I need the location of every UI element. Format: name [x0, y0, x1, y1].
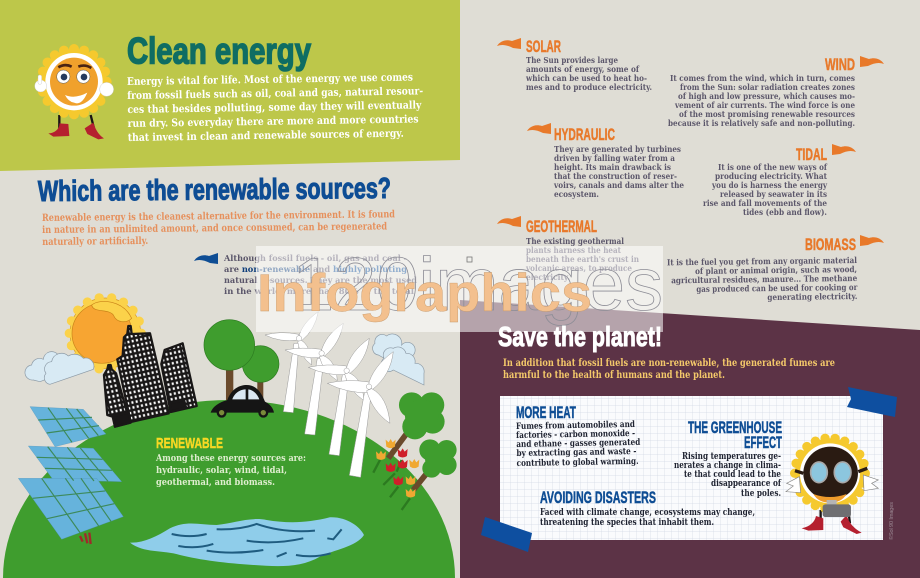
section: hydraulic: height. Its main drawback is: [554, 162, 671, 172]
section: tidal: producing electricity. What: [715, 171, 827, 181]
arrow: blue: [194, 253, 218, 264]
text: fossil fuels note: natural resources. They are the most used: [224, 275, 417, 285]
text: fumes warning: In addition that fossil fuels are non-renewable, the generated fumes are: [503, 358, 835, 369]
heading: Save the planet!: Save the planet!: [498, 321, 662, 352]
section: biomass: generating electricity.: [767, 291, 858, 302]
section: wind: of the most promising renewable resources: [679, 109, 855, 119]
illustration: green planet scene: [3, 297, 457, 578]
text: fossil fuels note: [223, 253, 417, 296]
section: greenhouse effect: the poles.: [741, 489, 781, 499]
section: wind: of high and low pressure, which causes mo-: [678, 91, 855, 101]
section: avoiding disasters: AVOIDING DISASTERS: [540, 488, 656, 507]
trees and car: [204, 320, 279, 418]
section: hydraulic: HYDRAULIC: [554, 125, 615, 144]
panel: save the planet background: [460, 300, 920, 578]
text: fossil fuels note: in the world, more than 80% of the total: [224, 286, 414, 296]
intro text: Energy is vital for life. Most of the energy we use comes: [127, 72, 413, 88]
text: renewable label: Among these energy sources are:: [155, 453, 306, 464]
section: more heat: [516, 403, 641, 469]
watermark: Infographics: [257, 264, 592, 323]
section: solar: SOLAR: [526, 37, 561, 56]
section: solar: The Sun provides large: [526, 55, 618, 65]
section: wind: from the Sun: solar radiation creates zones: [680, 82, 855, 92]
section: tidal: rise and fall movements of the: [703, 198, 827, 208]
section: more heat: Fumes from automobiles and: [516, 420, 635, 432]
section: tidal: [703, 144, 856, 217]
intro text: from fossil fuels such as oil, coal and gas, natural resour-: [127, 85, 423, 102]
section: biomass: agricultural residues, manure... The methane: [671, 273, 857, 285]
section: biomass: It is the fuel you get from any organic material: [667, 255, 857, 267]
section: solar: [497, 37, 652, 92]
section: wind: because it is relatively safe and non-polluting.: [668, 118, 855, 128]
section: wind: It comes from the wind, which in turn, comes: [670, 73, 855, 83]
clouds: [25, 334, 424, 385]
section: geothermal: plants harness the heat: [526, 245, 621, 255]
section: biomass: gas produced can be used for cooking or: [696, 282, 858, 294]
text: renewable label: RENEWABLE: [156, 435, 223, 452]
lake: [130, 517, 364, 566]
renewable intro text: naturally or artificially.: [42, 236, 148, 248]
title: Clean energy: Clean energy: [127, 30, 311, 72]
renewable intro text: Renewable energy is the cleanest alternative for the environment. It is found: [42, 209, 395, 224]
section: greenhouse effect: EFFECT: [744, 433, 782, 452]
section: more heat: factories - carbon monoxide -: [516, 429, 635, 441]
section: avoiding disasters: [540, 488, 755, 528]
text: renewable label: hydraulic, solar, wind, tidal,: [156, 465, 287, 476]
section: hydraulic: driven by falling water from a: [554, 153, 675, 163]
section: tidal: TIDAL: [796, 145, 827, 164]
section: greenhouse effect: THE GREENHOUSE: [688, 418, 782, 437]
mascot: smiling sun: [35, 49, 114, 139]
section: tidal: tides (ebb and flow).: [743, 207, 827, 217]
tape: bottom left: [481, 517, 532, 552]
section: greenhouse effect: te that could lead to the: [684, 470, 781, 480]
text: renewable label: [155, 435, 306, 488]
big sun: [69, 297, 141, 369]
section: wind: WIND: [825, 55, 855, 74]
section: geothermal: electricity.: [526, 272, 570, 282]
watermark: 120images: [292, 242, 663, 326]
text: fumes warning: [503, 358, 835, 381]
right trees and flowers: [373, 392, 457, 510]
section: greenhouse effect: disappearance of: [711, 479, 782, 489]
section: greenhouse effect: Rising temperatures ge-: [682, 452, 781, 462]
renewable intro text: in nature in an unlimited amount, and once consumed, can be regenerated: [42, 221, 387, 236]
section: more heat: and ethane - gasses generated: [516, 438, 640, 450]
section: more heat: contribute to global warming.: [517, 457, 639, 469]
section: geothermal: [497, 216, 639, 282]
text: renewable label: geothermal, and biomass.: [156, 477, 275, 488]
section: geothermal: beneath the earth's crust in: [526, 254, 639, 264]
photo credit: ©Sol 90 Images: [888, 502, 895, 540]
panel: grid paper note: [500, 396, 883, 540]
section: biomass: of plant or animal origin, such as wood,: [695, 264, 857, 276]
solar panels: [18, 407, 123, 544]
section: geothermal: volcanic areas, to produce: [525, 263, 632, 273]
section: greenhouse effect: nerates a change in clima-: [674, 461, 781, 471]
section: hydraulic: voirs, canals and dams alter the: [553, 180, 684, 190]
section: solar: which can be used to heat ho-: [525, 73, 647, 83]
text: fumes warning: harmful to the health of humans and the planet.: [503, 370, 725, 381]
mascot: sun with gas mask: [786, 438, 878, 534]
text: fossil fuels note: Although fossil fuels - oil, gas and coal -: [223, 253, 407, 263]
section: biomass: [667, 235, 884, 303]
intro text: ces that besides polluting, some day they will eventually: [127, 99, 422, 116]
city buildings: [104, 326, 197, 427]
section: solar: amounts of energy, some of: [526, 64, 640, 74]
section: hydraulic: [527, 123, 684, 199]
section: avoiding disasters: threatening the species that inhabit them.: [540, 518, 714, 528]
section: wind: [668, 55, 884, 128]
section: tidal: It is one of the new ways of: [718, 162, 828, 172]
section: biomass: BIOMASS: [805, 235, 856, 254]
intro text: [127, 71, 424, 144]
section: more heat: MORE HEAT: [516, 403, 576, 422]
section: hydraulic: ecosystem.: [554, 189, 599, 199]
heading: Which are the renewable sources?: Which are the renewable sources?: [38, 173, 391, 208]
tape: top right: [847, 387, 897, 417]
section: hydraulic: that the construction of reser-: [554, 171, 677, 181]
section: hydraulic: They are generated by turbines: [554, 144, 681, 154]
section: more heat: by extracting gas and waste -: [516, 447, 637, 459]
intro text: run dry. So everyday there are more and more countries: [128, 113, 419, 130]
wind turbines: [265, 312, 393, 477]
section: solar: mes and to produce electricity.: [526, 82, 652, 92]
hill: [3, 400, 455, 578]
section: geothermal: GEOTHERMAL: [526, 217, 597, 236]
section: avoiding disasters: Faced with climate change, ecosystems may change,: [540, 508, 755, 518]
section: tidal: released by seawater in its: [720, 189, 827, 199]
section: greenhouse effect: [674, 418, 782, 499]
section: geothermal: The existing geothermal: [526, 236, 624, 246]
watermark dot: [467, 257, 472, 262]
section: wind: vement of air currents. The wind force is one: [674, 100, 855, 110]
section: tidal: you do is harness the energy: [711, 180, 828, 190]
panel: clean energy header: [0, 0, 460, 171]
renewable intro text: [42, 209, 395, 248]
text: fossil fuels note: are non-renewable and highly polluting: [224, 264, 407, 274]
intro text: that invest in clean and renewable sources of energy.: [128, 128, 404, 144]
